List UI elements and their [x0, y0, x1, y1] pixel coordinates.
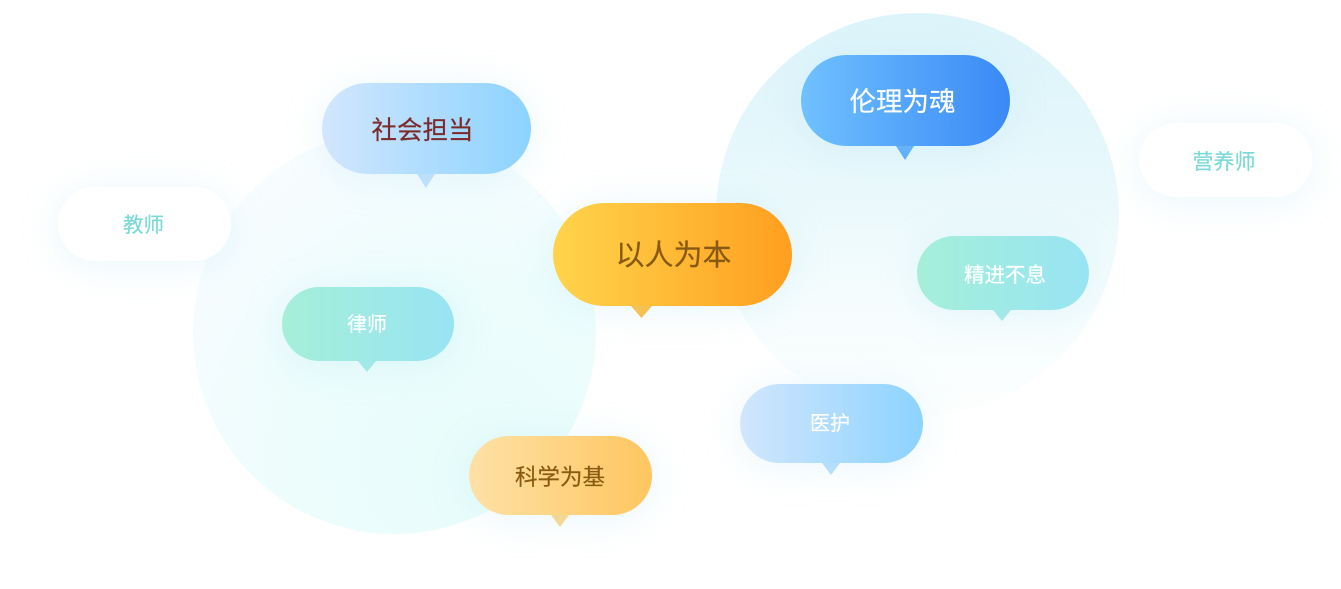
- label: [282, 287, 454, 361]
- label: 教师: [123, 214, 164, 237]
- bubble: 社会担当: [320, 81, 534, 188]
- label: 营养师: [1192, 151, 1256, 174]
- tail: [631, 306, 652, 318]
- tail: [822, 463, 840, 475]
- tail: [993, 310, 1011, 321]
- label: 以人为本: [615, 240, 732, 272]
- label: 社会担当: [371, 117, 474, 145]
- label: [553, 203, 792, 306]
- tail: [896, 146, 914, 160]
- label: [740, 384, 923, 463]
- label: [469, 436, 652, 515]
- background circle: left: [193, 131, 596, 534]
- label: 科学为基: [515, 465, 605, 490]
- tail: [358, 361, 376, 372]
- bubble: 科学为基: [469, 434, 654, 527]
- label: [1139, 123, 1312, 197]
- label: 精进不息: [964, 264, 1046, 287]
- bubble: 伦理为魂: [801, 55, 1010, 160]
- bubble: 教师: [56, 185, 232, 271]
- background circle: right: [716, 13, 1119, 416]
- tail: [417, 174, 435, 188]
- bubble: 律师: [282, 287, 454, 372]
- bubble: 医护: [738, 382, 924, 475]
- label: 伦理为魂: [850, 87, 956, 117]
- label: [801, 55, 1010, 146]
- label: [58, 187, 231, 261]
- label: [917, 236, 1089, 310]
- tail: [1216, 197, 1234, 208]
- label: [322, 83, 531, 174]
- tail: [135, 261, 153, 272]
- bubble: 精进不息: [917, 236, 1089, 321]
- bubble: 营养师: [1138, 121, 1314, 207]
- bubble: 以人为本: [552, 201, 792, 318]
- label: 律师: [347, 314, 387, 336]
- label: 医护: [810, 413, 850, 435]
- tail: [551, 515, 569, 527]
